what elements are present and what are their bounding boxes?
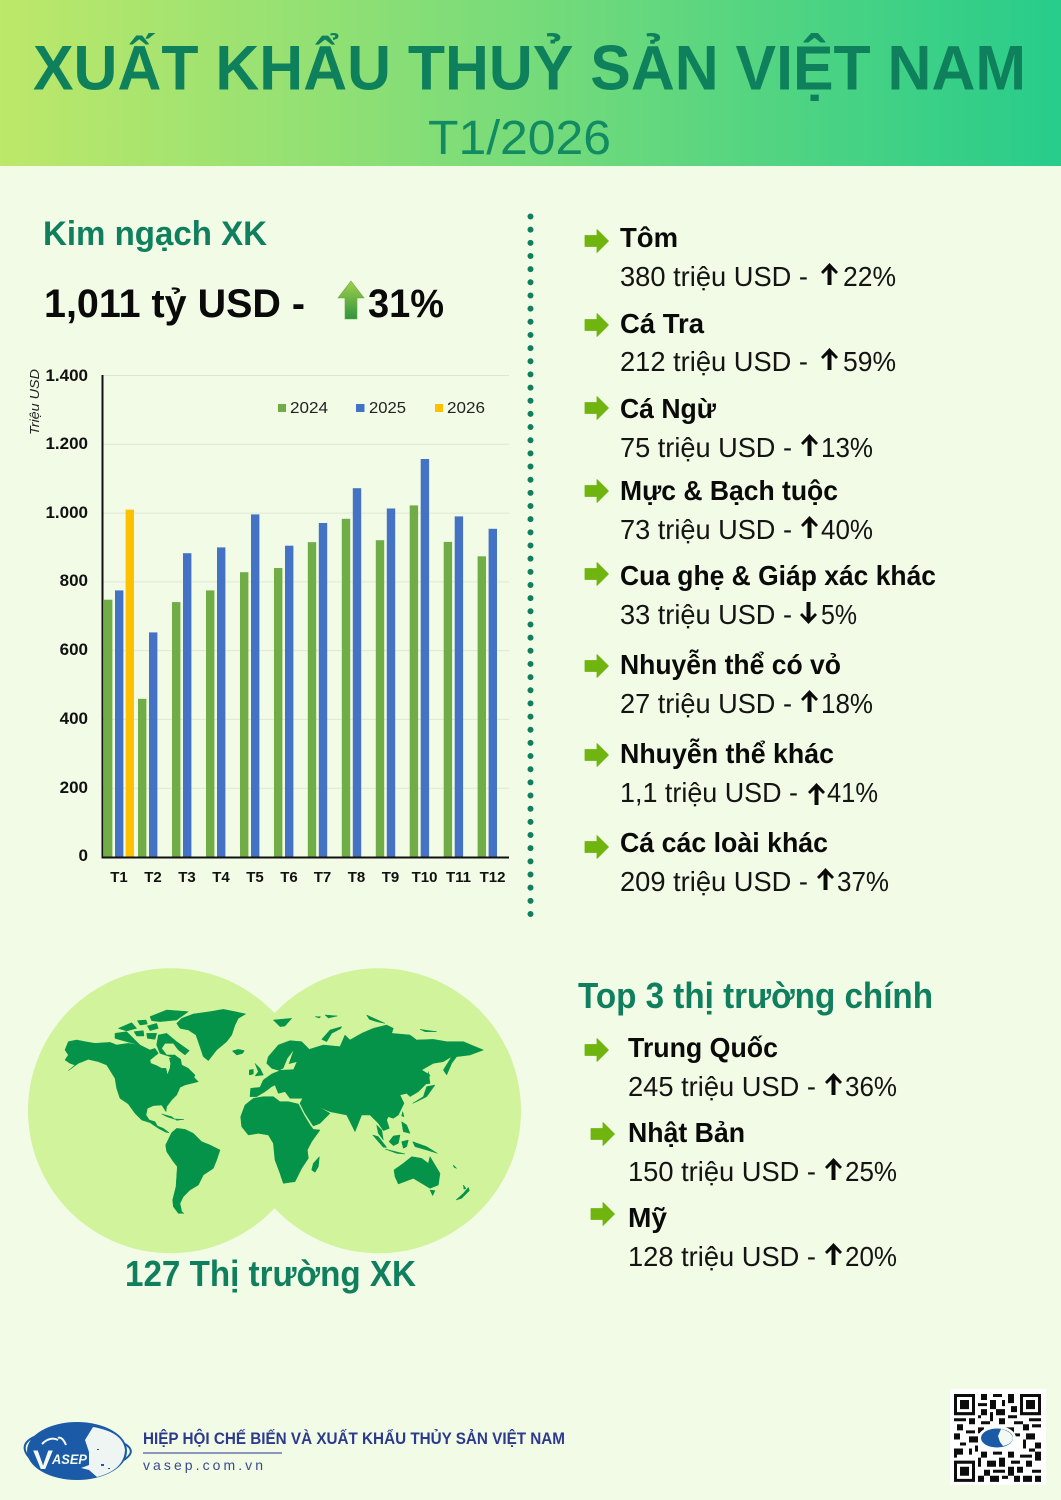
x axis labels: T7 xyxy=(314,869,331,886)
VASEP logo: ASEP xyxy=(51,1452,88,1467)
market: USA xyxy=(591,1202,897,1272)
map background circles xyxy=(28,968,521,1253)
item: Nhuyen the khac: 41% xyxy=(827,777,878,808)
item: Muc & Bach tuoc xyxy=(585,475,873,545)
title: XUẤT KHẨU THUỶ SẢN VIỆT NAM xyxy=(33,32,1026,104)
item: Nhuyen the khac xyxy=(585,738,878,808)
x axis labels xyxy=(110,869,505,886)
item: Cua ghe: 33 triệu USD - xyxy=(620,599,792,630)
y axis unit: Triệu USD xyxy=(27,369,42,435)
item: Cua ghe xyxy=(585,560,936,630)
chart legend xyxy=(278,400,485,417)
item: Nhuyen the khac: Nhuyễn thể khác xyxy=(620,738,834,769)
item: Ca Ngu: 13% xyxy=(821,432,873,463)
chart legend: 2026 xyxy=(447,400,485,417)
world map panel xyxy=(28,968,521,1294)
item: Cua ghe: Cua ghẹ & Giáp xác khác xyxy=(620,560,936,591)
market: China: Trung Quốc xyxy=(628,1032,778,1063)
panel: top 3 markets xyxy=(578,975,933,1272)
VASEP logo: V xyxy=(33,1445,53,1475)
item: Ca Tra: 59% xyxy=(843,346,896,377)
y axis labels: 600 xyxy=(60,640,88,659)
total value: 1,011 tỷ USD - xyxy=(44,282,305,326)
website: vasep.com.vn xyxy=(143,1457,263,1473)
item: Cua ghe: 5% xyxy=(821,599,857,630)
item: Ca Tra: 212 triệu USD - xyxy=(620,346,808,377)
y axis labels: 400 xyxy=(60,709,88,728)
bars 2024 xyxy=(104,505,486,857)
market: China xyxy=(585,1032,897,1102)
market: USA: Mỹ xyxy=(628,1202,667,1233)
panel: export value xyxy=(43,215,444,326)
chart legend: 2025 xyxy=(369,400,406,417)
x axis labels: T11 xyxy=(446,869,471,886)
market: Japan: 150 triệu USD - xyxy=(628,1156,816,1187)
x axis labels: T4 xyxy=(212,869,230,886)
x axis labels: T2 xyxy=(144,869,162,886)
y axis labels: 200 xyxy=(60,778,88,797)
bar 2026 xyxy=(126,510,134,857)
item: Tom: 22% xyxy=(843,261,896,292)
item: Tom: Tôm xyxy=(620,222,678,253)
bars 2025 xyxy=(115,459,497,857)
item: Nhuyen the co vo xyxy=(585,649,873,719)
x axis labels: T6 xyxy=(280,869,298,886)
market count: 127 Thị trường XK xyxy=(125,1253,416,1294)
item: Ca cac loai khac: 209 triệu USD - xyxy=(620,866,808,897)
item: Ca Tra xyxy=(585,308,896,377)
icon: big up arrow xyxy=(338,281,364,319)
subtitle: period: T1/2026 xyxy=(428,112,611,165)
world map continents xyxy=(65,1009,483,1213)
x axis labels: T10 xyxy=(412,869,437,886)
item: Muc & Bach tuoc: 73 triệu USD - xyxy=(620,514,792,545)
item: Ca Ngu: Cá Ngừ xyxy=(620,393,717,424)
heading: top 3: Top 3 thị trường chính xyxy=(578,975,933,1016)
footer xyxy=(25,1389,1046,1485)
item: Nhuyen the khac: 1,1 triệu USD - xyxy=(620,777,798,808)
QR code xyxy=(950,1389,1046,1485)
x axis labels: T12 xyxy=(480,869,505,886)
chart legend: 2024 xyxy=(290,400,328,417)
item: Ca Ngu: 75 triệu USD - xyxy=(620,432,792,463)
item: Muc & Bach tuoc: Mực & Bạch tuộc xyxy=(620,475,838,506)
VASEP logo xyxy=(25,1422,131,1480)
x axis labels: T9 xyxy=(382,869,399,886)
item: Nhuyen the co vo: 27 triệu USD - xyxy=(620,688,792,719)
x axis labels: T1 xyxy=(110,869,128,886)
Africa, Eurasia and Oceania xyxy=(241,1015,483,1200)
x axis labels: T3 xyxy=(178,869,196,886)
item: Ca cac loai khac xyxy=(585,827,889,897)
item: Ca cac loai khac: 37% xyxy=(837,866,889,897)
header banner xyxy=(0,0,1061,166)
x axis labels: T5 xyxy=(246,869,264,886)
item: Nhuyen the co vo: 18% xyxy=(821,688,873,719)
item: Tom: 380 triệu USD - xyxy=(620,261,808,292)
y axis labels: 800 xyxy=(60,571,88,590)
item: Ca Ngu xyxy=(585,393,873,463)
bar chart: monthly export value xyxy=(27,366,509,886)
item: Nhuyen the co vo: Nhuyễn thể có vỏ xyxy=(620,649,841,680)
market: USA: 20% xyxy=(845,1241,897,1272)
axes xyxy=(102,375,509,858)
y axis labels: 1.400 xyxy=(45,366,88,385)
QR logo xyxy=(978,1426,1016,1450)
y axis labels: 1.200 xyxy=(45,434,88,453)
item: Ca cac loai khac: Cá các loài khác xyxy=(620,827,828,858)
y axis labels: 1.000 xyxy=(45,503,88,522)
market: Japan: 25% xyxy=(845,1156,897,1187)
item: Muc & Bach tuoc: 40% xyxy=(821,514,873,545)
item: Ca Tra: Cá Tra xyxy=(620,308,704,339)
market: China: 36% xyxy=(845,1071,897,1102)
Americas and Greenland xyxy=(65,1009,246,1213)
market: China: 245 triệu USD - xyxy=(628,1071,816,1102)
panel: products list xyxy=(585,222,936,897)
y axis labels: 0 xyxy=(79,846,88,865)
market: USA: 128 triệu USD - xyxy=(628,1241,816,1272)
heading: kim ngach: Kim ngạch XK xyxy=(43,215,267,253)
growth percentage: 31% xyxy=(368,282,444,326)
item: Tom xyxy=(585,222,896,292)
market: Japan: Nhật Bản xyxy=(628,1117,745,1148)
y axis labels xyxy=(45,366,88,865)
market: Japan xyxy=(591,1117,897,1187)
x axis labels: T8 xyxy=(348,869,365,886)
association name: HIỆP HỘI CHẾ BIẾN VÀ XUẤT KHẨU THỦY SẢN VIỆT NAM xyxy=(143,1429,565,1448)
